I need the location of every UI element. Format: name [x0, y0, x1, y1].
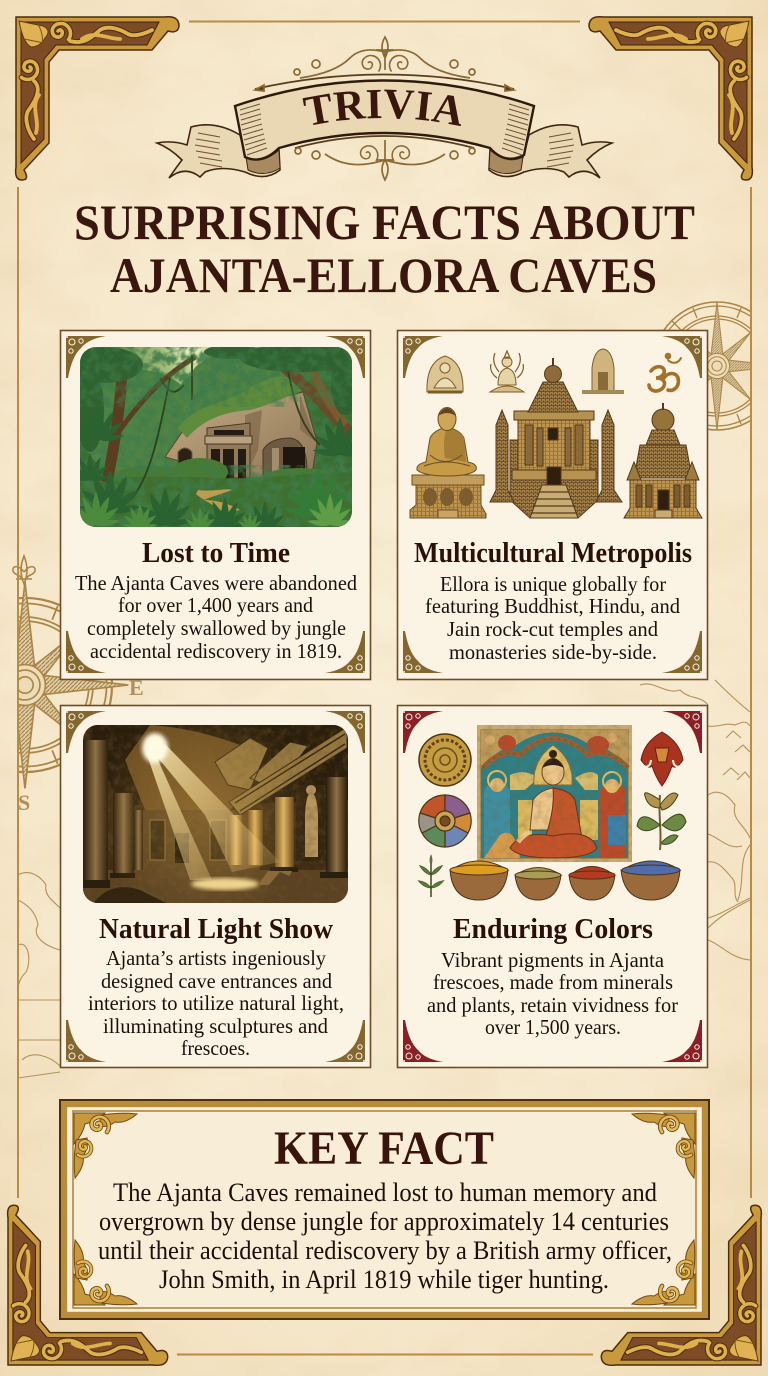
body text [98, 1178, 672, 1294]
banner: central band [235, 80, 534, 160]
body text: for over 1,400 years and [118, 593, 313, 617]
corner ornament: bottom left [8, 1205, 168, 1365]
body text: Ellora is unique globally for [440, 572, 666, 596]
banner ornament: upper flourish [255, 37, 514, 91]
body text: John Smith, in April 1819 while tiger hunting. [159, 1265, 609, 1294]
corner ornament: bottom right [601, 1205, 761, 1365]
illustration: jungle cave [80, 347, 352, 527]
icon: colour wheel [419, 795, 471, 847]
panel: enduring colors [398, 706, 708, 1068]
compass rose: upper right [663, 301, 750, 431]
banner: word trivia: TRIVIA [302, 90, 461, 126]
illustration: sunlit cave hall [80, 725, 350, 905]
illustration: fresco and pigments [417, 725, 686, 900]
body text: Jain rock-cut temples and [447, 617, 658, 641]
heading: Lost to Time [142, 537, 290, 569]
icon: shrine [582, 349, 624, 394]
icon: buddha medallion [427, 356, 463, 392]
body text: over 1,500 years. [485, 1015, 621, 1039]
body text: interiors to utilize natural light, [88, 991, 344, 1015]
body text: frescoes. [181, 1036, 250, 1060]
body text [427, 948, 678, 1039]
flourishes: gold key fact corners [74, 1113, 695, 1305]
heading: Multicultural Metropolis [414, 537, 692, 569]
body text: featuring Buddhist, Hindu, and [425, 594, 680, 618]
panel: lost to time [60, 330, 370, 680]
panel: natural light show [60, 706, 370, 1068]
map lines: lower left [18, 873, 60, 1078]
body text: overgrown by dense jungle for approximately 14 centuries [99, 1207, 669, 1236]
banner: right tail [489, 125, 612, 178]
body text [75, 571, 357, 663]
heading: Natural Light Show [99, 913, 333, 945]
flourishes: card corners [66, 711, 365, 1062]
heading: KEY FACT [274, 1122, 494, 1175]
body text: monasteries side-by-side. [449, 640, 657, 664]
body text: and plants, retain vividness for [427, 993, 678, 1017]
icon: small herb sprig [417, 854, 445, 897]
body text: frescoes, made from minerals [433, 970, 673, 994]
corner ornament: top left [16, 17, 179, 180]
icon: ochre pigment bowl [450, 861, 508, 900]
banner: left tail [157, 125, 280, 178]
icon: red floral motif [640, 732, 684, 786]
body text: The Ajanta Caves were abandoned [75, 571, 357, 595]
body text: designed cave entrances and [101, 969, 332, 993]
title: AJANTA-ELLORA CAVES [110, 247, 657, 303]
banner: trivia ribbon [154, 35, 615, 182]
temple: central rock-cut shrine [490, 358, 622, 518]
body text [425, 572, 680, 664]
temple: right shrine [624, 403, 702, 518]
illustration: temples and statues [410, 349, 702, 518]
flourishes: card corners [403, 336, 702, 673]
body text: accidental rediscovery in 1819. [90, 639, 342, 663]
body text: until their accidental rediscovery by a British army officer, [98, 1236, 672, 1265]
icon: green plant [637, 793, 686, 850]
compass rose: left with fleur-de-lis [12, 554, 142, 810]
body text [88, 946, 344, 1060]
compass rose: left with fleur-de-lis: S [18, 790, 30, 815]
icon: gold mandala [419, 734, 471, 786]
panel: key fact [60, 1100, 709, 1319]
banner ornament: lower flourish [295, 136, 475, 180]
flourishes: crimson card corners [403, 711, 702, 1062]
body text: Vibrant pigments in Ajanta [441, 948, 665, 972]
heading: Enduring Colors [453, 913, 653, 945]
body text: completely swallowed by jungle [87, 616, 346, 640]
banner: engraved hatching [195, 104, 574, 167]
icon: blue pigment bowl [621, 861, 680, 900]
banner: folds [246, 150, 523, 174]
map lines: lower right [640, 680, 750, 960]
icon: deity [490, 351, 524, 392]
icon: red pigment bowl [569, 866, 615, 900]
title [74, 194, 695, 303]
body text: The Ajanta Caves remained lost to human memory and [113, 1178, 657, 1207]
title: SURPRISING FACTS ABOUT [74, 194, 695, 250]
body text: illuminating sculptures and [103, 1014, 328, 1038]
icon: om symbol [649, 354, 681, 391]
fresco: seated buddha [477, 725, 632, 862]
panel: multicultural metropolis [398, 330, 708, 680]
statue: seated buddha on pedestal [410, 408, 486, 518]
body text: Ajanta’s artists ingeniously [106, 946, 326, 970]
icon: olive pigment bowl [515, 868, 561, 900]
compass rose: left with fleur-de-lis: E [129, 675, 144, 700]
flourishes: card corners [66, 336, 365, 673]
corner ornament: top right [589, 17, 752, 180]
